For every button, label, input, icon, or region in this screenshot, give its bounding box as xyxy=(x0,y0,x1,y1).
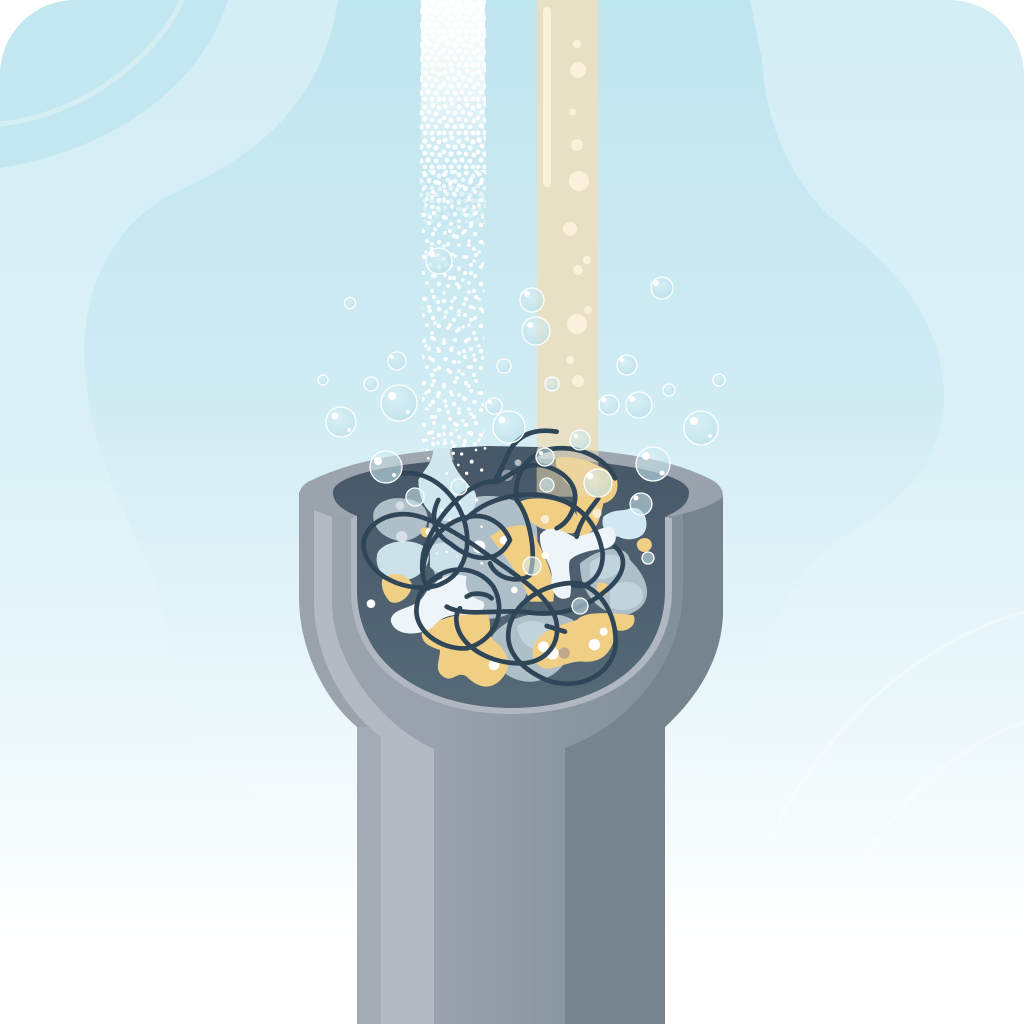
small white specks xyxy=(367,459,608,670)
cavity xyxy=(333,458,689,708)
inner lip xyxy=(351,515,672,714)
falling water droplets in drain xyxy=(425,429,486,565)
bright blue foam xyxy=(602,508,647,539)
tangled hair strands xyxy=(364,431,623,684)
background blob: central wash xyxy=(84,0,944,398)
right shaded body xyxy=(565,497,723,1024)
water stream xyxy=(420,0,486,450)
murky stream overlay on drain xyxy=(537,448,598,497)
rim top surface xyxy=(299,447,723,516)
pale grey deposits xyxy=(373,496,647,682)
yellow grease deposits xyxy=(382,457,652,687)
murky stream xyxy=(537,0,598,450)
outer silhouette xyxy=(299,492,723,1024)
background blob: top-left corner xyxy=(0,0,228,168)
brown speck xyxy=(559,647,570,659)
background arcs xyxy=(0,0,1024,648)
bubbles xyxy=(318,248,725,614)
icy deposits xyxy=(377,541,643,649)
left light band xyxy=(314,510,434,1024)
dark patch on rim behind water xyxy=(452,446,538,490)
bubble cluster xyxy=(318,248,725,614)
water plume entering drain xyxy=(418,448,476,522)
bubble highlights xyxy=(332,251,712,500)
clog mass xyxy=(364,429,652,687)
pipe left stripe xyxy=(357,727,382,1024)
white foam xyxy=(391,527,616,633)
drain pipe and collar xyxy=(299,447,723,1024)
